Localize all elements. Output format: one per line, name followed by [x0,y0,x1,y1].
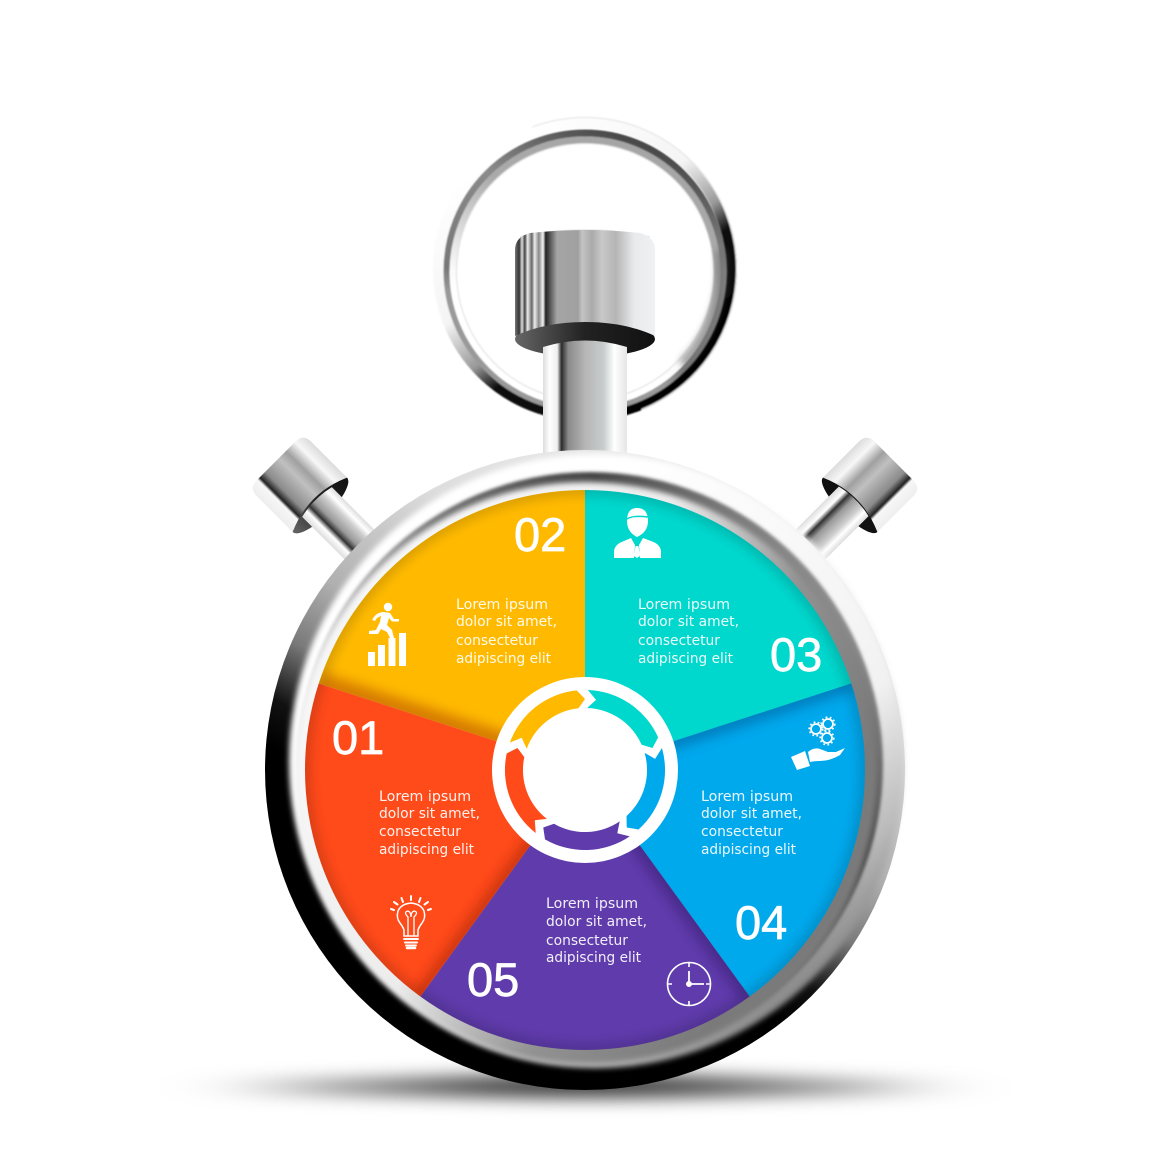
icon: runner on bars [368,603,406,666]
text block 02: adipiscing elit [456,650,551,667]
text block 01: adipiscing elit [379,841,474,858]
panel: 02 yellow segment [318,490,585,742]
ground shadow [265,1074,905,1098]
text block 05: Lorem ipsum [546,895,638,912]
right button [778,434,921,577]
number 04: 04 [735,896,787,949]
arrow: yellow [510,690,585,749]
text block 05: consectetur [546,932,628,949]
text block 03: adipiscing elit [638,650,733,667]
text block 05: dolor sit amet, [546,913,647,930]
text block 04: adipiscing elit [701,841,796,858]
arrow: teal [582,674,661,763]
watch case [265,450,905,1090]
text block 02: consectetur [456,632,538,649]
text block 03: consectetur [638,632,720,649]
text block 05 [546,895,647,966]
rim shadow [304,489,866,1051]
text block 02: Lorem ipsum [456,596,548,613]
watch face [304,489,866,1051]
panel: 01 red segment [305,684,530,996]
left button [249,434,392,577]
number 02: 02 [514,508,566,561]
panel: 04 blue segment [640,684,865,996]
text block 03 [638,596,739,667]
icon: clock [668,962,710,1006]
text block 02 [456,596,557,667]
arrow: purple [538,787,633,879]
centre hub [486,674,693,879]
number 01: 01 [332,711,384,764]
arrow: blue [597,743,693,834]
crown stem [543,330,627,458]
number 03: 03 [770,628,822,681]
text block 02: dolor sit amet, [456,613,557,630]
top ring [434,118,736,420]
text block 04: Lorem ipsum [701,788,793,805]
icon: hand with gears [791,717,845,770]
text block 04 [701,788,802,858]
text block 03: Lorem ipsum [638,596,730,613]
text block 01: dolor sit amet, [379,805,480,822]
text block 03: dolor sit amet, [638,613,739,630]
panel: 05 purple segment [420,845,750,1050]
text block 05: adipiscing elit [546,949,641,966]
icon: light bulb [391,896,431,948]
panel: 03 teal segment [585,490,852,742]
text block 01 [379,788,480,858]
arrow: red [486,745,565,835]
text block 01: Lorem ipsum [379,788,471,805]
number 05: 05 [467,953,519,1006]
crown knob [515,229,655,372]
text block 04: consectetur [701,823,783,840]
icon: businessman [614,508,661,558]
text block 01: consectetur [379,823,461,840]
text block 04: dolor sit amet, [701,805,802,822]
